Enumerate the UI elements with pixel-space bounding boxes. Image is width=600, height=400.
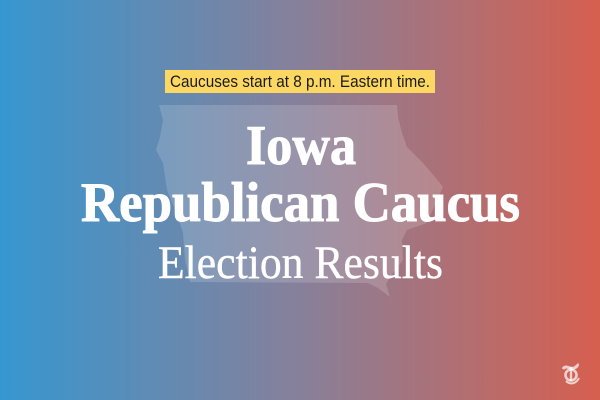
Iowa state silhouette (156, 105, 443, 297)
title: Iowa (246, 115, 356, 177)
title: Election Results (158, 237, 443, 289)
icon: newspaper logo (563, 364, 579, 383)
notice banner: Caucuses start at 8 p.m. Eastern time. (170, 73, 430, 91)
title: Republican Caucus (81, 172, 520, 234)
title (81, 115, 520, 289)
